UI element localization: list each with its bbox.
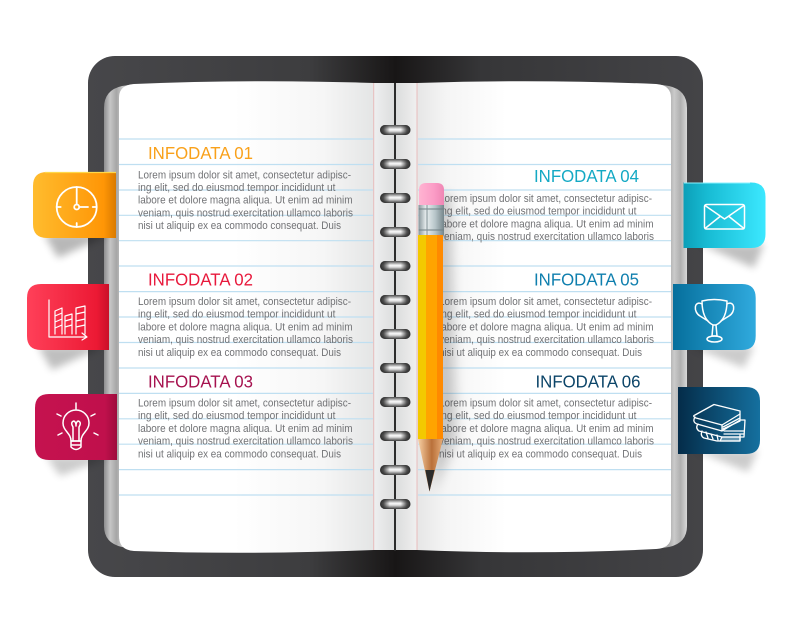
text block: infodata 06: INFODATA 06 <box>536 372 640 392</box>
tab shape <box>33 172 116 238</box>
text block: infodata 05: labore et dolore magna aliqua. Ut enim ad minim <box>439 321 654 333</box>
text block: infodata 04: labore et dolore magna aliqua. Ut enim ad minim <box>439 218 654 230</box>
text block: infodata 06 <box>439 372 654 460</box>
right page stack <box>655 84 687 549</box>
text block: infodata 06: nisi ut aliquip ex ea commodo consequat. Duis <box>439 448 642 460</box>
tab: books <box>678 387 760 472</box>
tab shadow <box>690 346 754 368</box>
ferrule <box>418 205 444 235</box>
text block: infodata 02: Lorem ipsum dolor sit amet, consectetur adipisc- <box>138 296 351 308</box>
text block: infodata 05: INFODATA 05 <box>534 270 639 290</box>
text block: infodata 02: ing elit, sed do eiusmod tempor incididunt ut <box>138 309 336 321</box>
tab: envelope <box>684 182 766 268</box>
text block: infodata 05 <box>439 270 654 359</box>
text block: infodata 04 <box>439 166 654 243</box>
pencil tip <box>418 439 443 492</box>
text block: infodata 01: labore et dolore magna aliqua. Ut enim ad minim <box>138 195 352 207</box>
right page <box>417 81 671 552</box>
text block: infodata 03: veniam, quis nostrud exercitation ullamco laboris <box>138 436 353 448</box>
icon: trophy <box>695 300 734 342</box>
notebook pages <box>119 81 671 553</box>
icon: light bulb <box>57 403 98 450</box>
text block: infodata 03: ing elit, sed do eiusmod tempor incididunt ut <box>138 410 336 422</box>
pencil body <box>418 235 443 439</box>
margin lines and spine wire <box>374 83 417 551</box>
text block: infodata 04: INFODATA 04 <box>534 166 639 186</box>
icon: chart <box>49 300 87 340</box>
text block: infodata 01: INFODATA 01 <box>148 143 253 163</box>
icon: envelope <box>704 204 744 229</box>
tab shape <box>684 182 766 248</box>
text block: infodata 02: nisi ut aliquip ex ea commodo consequat. Duis <box>138 347 341 359</box>
eraser <box>419 183 444 205</box>
text block: infodata 01 <box>138 143 353 232</box>
tab: trophy <box>673 284 756 368</box>
text block: infodata 01: nisi ut aliquip ex ea commodo consequat. Duis <box>138 220 341 232</box>
left page <box>119 81 374 553</box>
text block: infodata 06: Lorem ipsum dolor sit amet, consectetur adipisc- <box>439 398 652 410</box>
pencil shadow <box>434 195 456 490</box>
text block: infodata 01: Lorem ipsum dolor sit amet, consectetur adipisc- <box>138 169 351 181</box>
text block: infodata 03: Lorem ipsum dolor sit amet, consectetur adipisc- <box>138 398 351 410</box>
ruled lines <box>119 139 671 495</box>
text block: infodata 02 <box>138 270 353 359</box>
icon: clock <box>57 187 97 227</box>
tab shape <box>678 387 760 454</box>
spiral rings <box>380 125 410 509</box>
text block: infodata 05: nisi ut aliquip ex ea commodo consequat. Duis <box>439 347 642 359</box>
text block: infodata 04: veniam, quis nostrud exercitation ullamco laboris <box>439 231 654 243</box>
text block: infodata 03: nisi ut aliquip ex ea commodo consequat. Duis <box>138 448 341 460</box>
tab: clock <box>33 172 116 258</box>
tab shape <box>673 284 756 350</box>
text block: infodata 02: veniam, quis nostrud exercitation ullamco laboris <box>138 334 353 346</box>
pencil <box>418 183 456 492</box>
text block: infodata 01: ing elit, sed do eiusmod tempor incididunt ut <box>138 182 336 194</box>
tab shape <box>35 394 117 460</box>
text block: infodata 02: INFODATA 02 <box>148 270 253 290</box>
tab shadow <box>46 456 112 476</box>
text block: infodata 05: veniam, quis nostrud exercitation ullamco laboris <box>439 334 654 346</box>
notebook cover <box>88 56 703 577</box>
icon: books <box>694 404 745 441</box>
text block: infodata 03: INFODATA 03 <box>148 372 253 392</box>
tab shape <box>27 284 109 350</box>
text block: infodata 06: ing elit, sed do eiusmod tempor incididunt ut <box>439 410 636 422</box>
text block: infodata 03: labore et dolore magna aliqua. Ut enim ad minim <box>138 423 352 435</box>
tab: chart <box>27 284 109 370</box>
text block: infodata 05: ing elit, sed do eiusmod tempor incididunt ut <box>439 309 636 321</box>
text block: infodata 02: labore et dolore magna aliqua. Ut enim ad minim <box>138 321 352 333</box>
text block: infodata 06: veniam, quis nostrud exercitation ullamco laboris <box>439 436 654 448</box>
text block: infodata 04: Lorem ipsum dolor sit amet, consectetur adipisc- <box>439 193 652 205</box>
text block: infodata 05: Lorem ipsum dolor sit amet, consectetur adipisc- <box>439 296 652 308</box>
tab shadow <box>695 450 758 472</box>
text block: infodata 06: labore et dolore magna aliqua. Ut enim ad minim <box>439 423 654 435</box>
tab shadow <box>700 244 764 268</box>
text block: infodata 04: ing elit, sed do eiusmod tempor incididunt ut <box>439 206 636 218</box>
text block: infodata 03 <box>138 372 353 460</box>
text block: infodata 01: veniam, quis nostrud exercitation ullamco laboris <box>138 207 353 219</box>
spine strip <box>374 83 417 550</box>
left page stack <box>104 84 135 549</box>
tab: light bulb <box>35 394 117 476</box>
tab shadow <box>44 234 110 258</box>
tab shadow <box>38 346 104 370</box>
